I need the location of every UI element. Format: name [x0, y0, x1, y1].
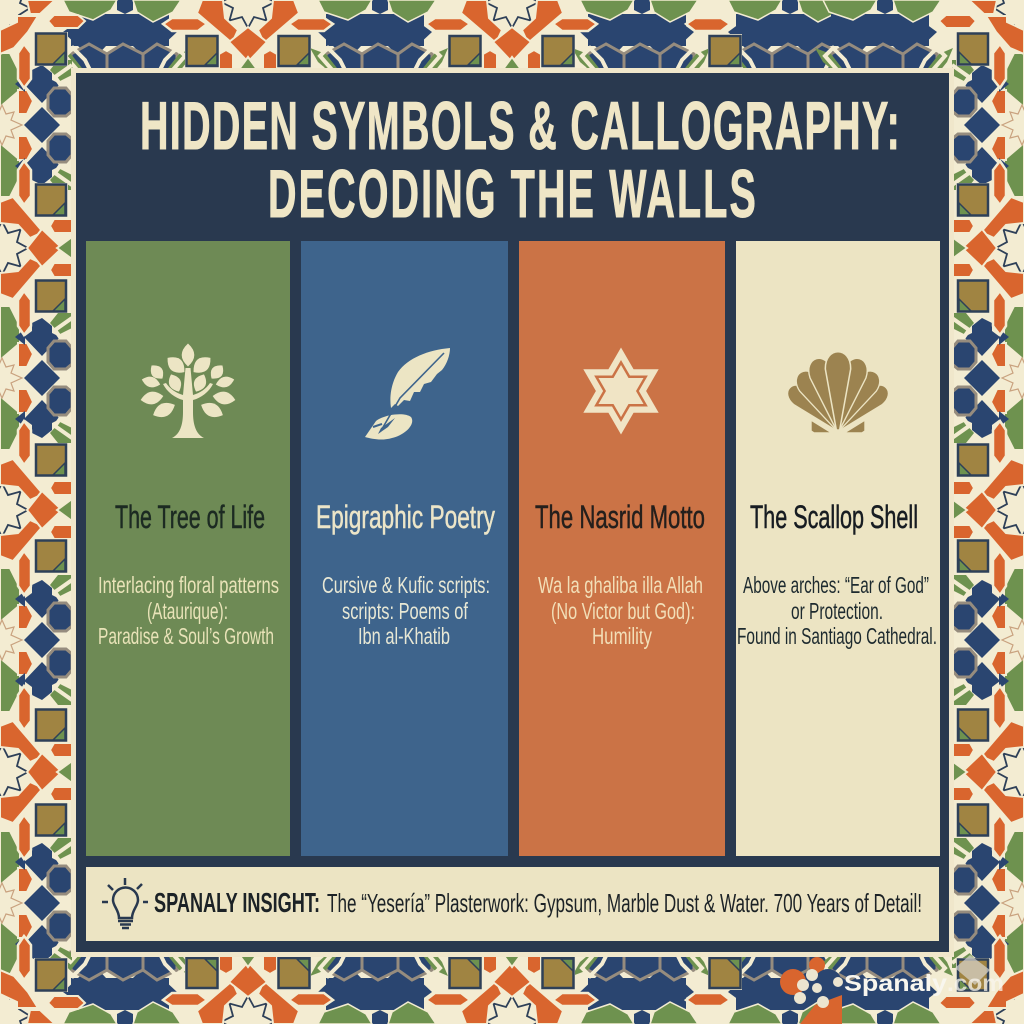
description: [98, 572, 279, 649]
icon: tree: [140, 344, 236, 438]
description: Humility: [592, 623, 652, 649]
icon: six pointed star: [583, 348, 659, 434]
insight background: [86, 867, 939, 941]
watermark logo: [780, 957, 843, 1024]
heading: The Nasrid Motto: [535, 499, 705, 535]
panel: The Tree of Life: [86, 241, 290, 856]
border corner: bottom left: [0, 970, 85, 1024]
border: top geometric strip: [55, 0, 953, 72]
description: [737, 572, 937, 649]
insight label: SPANALY INSIGHT:: [154, 887, 320, 918]
watermark text: .com: [947, 970, 1004, 996]
title: [140, 88, 900, 232]
border corner: bottom right: [939, 970, 1024, 1024]
blue panel background: [301, 241, 508, 856]
border corner: top left: [0, 0, 85, 54]
description: [538, 572, 703, 649]
panel: The Scallop Shell: [736, 241, 940, 856]
icon: quill and ink: [365, 348, 450, 440]
insight bar: [86, 867, 939, 941]
icon: scallop shell: [783, 352, 893, 437]
orange panel background: [519, 241, 725, 856]
green panel background: [86, 241, 290, 856]
panel: Epigraphic Poetry: [301, 241, 508, 856]
description: Ibn al-Khatib: [358, 623, 450, 649]
description: (Ataurique):: [147, 598, 228, 624]
heading: The Scallop Shell: [750, 499, 918, 535]
heading: The Tree of Life: [115, 499, 265, 535]
description: (No Victor but God):: [551, 598, 695, 624]
title: DECODING THE WALLS: [268, 156, 756, 232]
border: right geometric strip: [952, 32, 1024, 992]
description: [322, 572, 490, 649]
icon: light bulb: [102, 878, 148, 928]
description: Above arches: “Ear of God”: [743, 572, 929, 598]
watermark: Spanaly.com: [780, 955, 1004, 1024]
watermark diamond: [955, 955, 990, 985]
description: Paradise & Soul’s Growth: [98, 623, 274, 649]
border: left geometric strip: [0, 32, 72, 992]
border corner: top right: [939, 0, 1024, 54]
title: HIDDEN SYMBOLS & CALLOGRAPHY:: [140, 88, 900, 164]
description: scripts: Poems of: [342, 598, 468, 624]
description: Cursive & Kufic scripts:: [322, 572, 490, 598]
cream panel background: [736, 241, 940, 856]
heading: Epigraphic Poetry: [316, 499, 495, 535]
description: Interlacing floral patterns: [98, 572, 279, 598]
watermark text: Spanaly: [844, 970, 947, 996]
description: Wa la ghaliba illa Allah: [538, 572, 703, 598]
central frame: [74, 70, 952, 954]
description: or Protection.: [791, 598, 883, 624]
panel: The Nasrid Motto: [519, 241, 725, 856]
border: bottom geometric strip: [55, 952, 953, 1024]
watermark text: [844, 970, 1004, 996]
